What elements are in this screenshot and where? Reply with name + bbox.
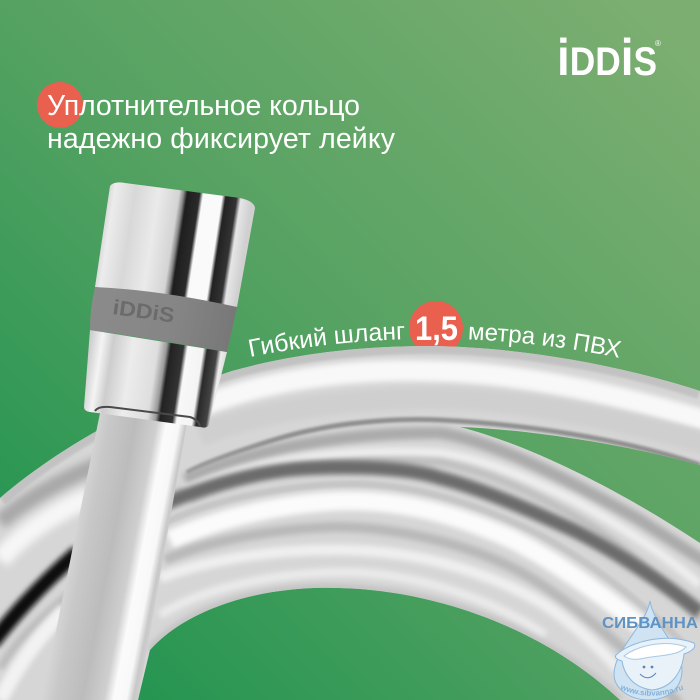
curved caption: flexible hose: Гибкий шланг xyxy=(248,326,404,357)
left strand lower grey xyxy=(0,593,70,668)
highlight circle: 1,5 xyxy=(409,301,463,355)
highlight circle xyxy=(37,82,83,128)
heading line two: надежно фиксирует лейку xyxy=(47,123,396,155)
tub smile xyxy=(640,673,656,678)
rubber sealing ring xyxy=(90,287,237,352)
left strand dark xyxy=(0,552,78,643)
left strand silver xyxy=(0,462,105,522)
white band xyxy=(170,501,640,625)
upper chrome cylinder xyxy=(95,182,255,307)
logo: iddis: iDDiS xyxy=(557,29,657,87)
vertical hose xyxy=(42,413,187,700)
heading line one: Уплотнительное кольцо xyxy=(47,90,360,122)
curved caption: flexible hose: метра из ПВХ xyxy=(469,326,622,358)
water drop xyxy=(614,601,682,700)
lower chrome ring xyxy=(84,330,227,428)
tub face xyxy=(643,666,653,668)
tub rim xyxy=(624,644,686,659)
coiled hose xyxy=(0,340,700,700)
curved caption: flexible hose xyxy=(248,310,622,358)
lower white band xyxy=(160,572,545,635)
embossed logo: iDDiS xyxy=(111,296,176,328)
second coil silver edge xyxy=(185,433,700,565)
left strand highlight xyxy=(0,497,90,560)
logo: iddis: ® xyxy=(655,39,661,48)
shower hose fitting xyxy=(84,182,255,428)
top coil lower shadow xyxy=(187,419,700,473)
dark band xyxy=(150,467,700,612)
watermark: sibvanna xyxy=(602,600,698,700)
band below dark xyxy=(160,484,690,650)
curved caption: flexible hose: 1,5 xyxy=(415,310,458,348)
text block: sealing ring xyxy=(37,82,396,155)
website: www.sibvanna.ru xyxy=(621,685,684,696)
ring inner lip xyxy=(95,407,200,427)
brand name: СИБВАННА xyxy=(602,615,698,632)
second coil grey xyxy=(190,461,700,620)
top coil highlight xyxy=(205,371,700,422)
second coil highlight xyxy=(185,452,700,585)
top coil lower silver xyxy=(652,418,700,434)
bathtub xyxy=(615,638,695,690)
inner edge silver xyxy=(150,588,620,700)
pale band xyxy=(160,550,650,700)
silver band xyxy=(165,527,680,700)
outer edge shade xyxy=(0,346,700,498)
left strand lower white xyxy=(0,610,65,700)
